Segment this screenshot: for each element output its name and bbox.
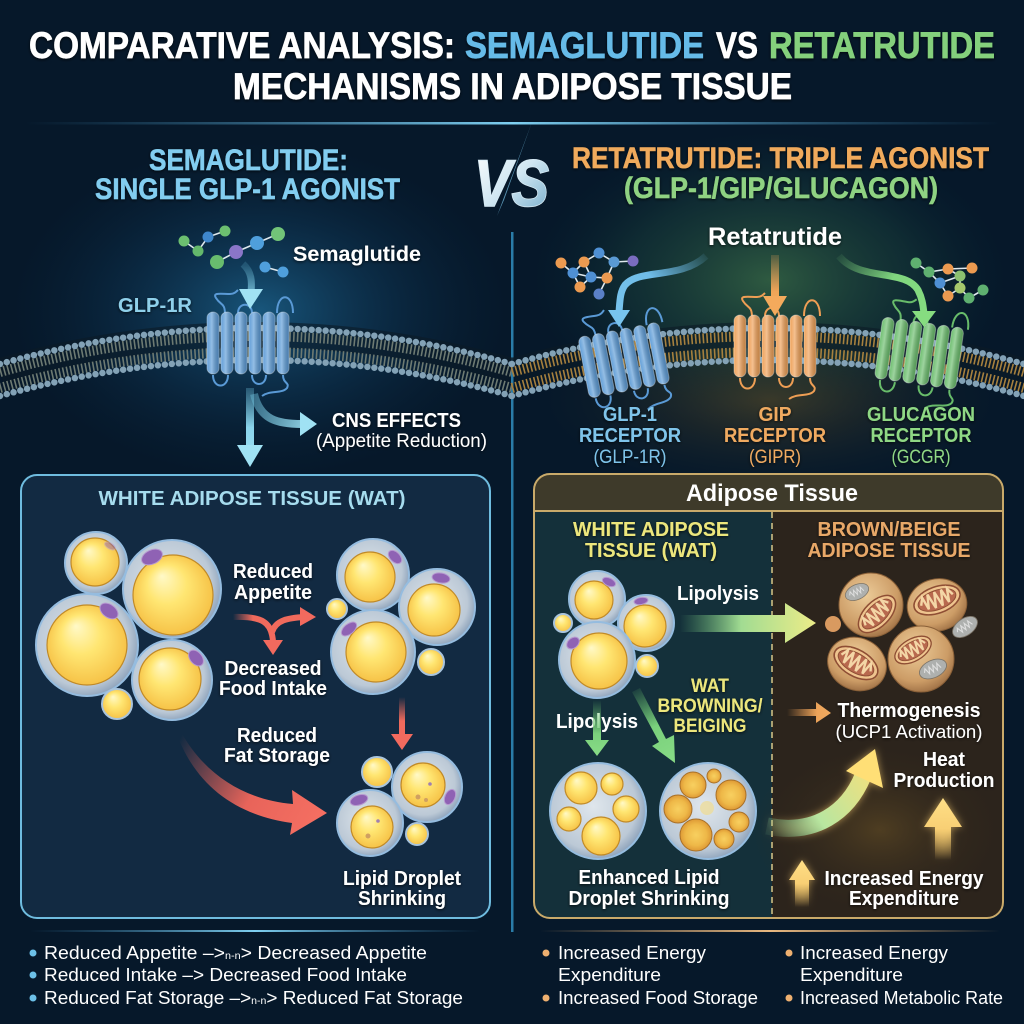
heading: brown beige adipose tissue: ADIPOSE TISSUE	[808, 540, 970, 562]
label: heat production: Production	[894, 770, 994, 792]
molecule: retatrutide left	[556, 248, 638, 300]
arrow: large curved arrow to thermogenesis	[767, 749, 883, 828]
list: retatrutide effects column 2: Increased Energy	[800, 943, 948, 963]
list: semaglutide effects: Reduced Fat Storage –> n-n> Reduced Fat Storage	[44, 988, 463, 1008]
heading: white adipose tissue: WHITE ADIPOSE	[573, 519, 729, 541]
divider: left bottom	[30, 930, 480, 932]
label: CNS effects: CNS EFFECTS	[332, 410, 461, 432]
label: reduced fat storage: Reduced	[237, 725, 317, 747]
title: SEMAGLUTIDE	[465, 25, 704, 66]
arrow: semaglutide to receptor	[239, 264, 263, 309]
label: GLP-1 receptor	[579, 404, 682, 468]
heading: brown beige adipose tissue: BROWN/BEIGE	[818, 519, 960, 541]
cell cluster: brown adipocytes	[819, 572, 981, 700]
arrow: to thermogenesis	[787, 702, 831, 723]
label: reduced fat storage	[224, 725, 330, 767]
list: semaglutide effects: Reduced Intake –> Decreased Food Intake	[44, 965, 407, 985]
heading: retatrutide: (GLP-1/GIP/GLUCAGON)	[624, 172, 938, 205]
divider: right bottom	[540, 930, 1000, 932]
label: decreased food intake: Decreased	[224, 658, 322, 680]
label: enhanced lipid droplet shrinking	[568, 867, 730, 910]
label: CNS effects: (Appetite Reduction)	[316, 431, 487, 452]
title: MECHANISMS IN ADIPOSE TISSUE	[233, 66, 792, 107]
label: thermogenesis: (UCP1 Activation)	[836, 722, 982, 742]
panel: semaglutide adipose tissue	[21, 475, 490, 918]
receptor: GLP-1	[574, 300, 678, 420]
membrane: right	[512, 328, 1024, 396]
cell cluster: shrunken adipocytes	[337, 752, 462, 856]
title: VS	[716, 25, 758, 66]
label: heat production	[894, 749, 994, 792]
heading: semaglutide	[95, 144, 400, 206]
label: heat production: Heat	[923, 749, 965, 771]
label: glucagon receptor: (GCGR)	[892, 447, 950, 468]
cell: enhanced droplets	[550, 763, 646, 859]
label: lipid droplet shrinking: Lipid Droplet	[343, 868, 461, 890]
list: retatrutide effects column 2: Increased Metabolic Rate	[800, 988, 1003, 1008]
cell cluster: large adipocytes	[36, 532, 221, 720]
label: reduced appetite: Reduced	[233, 561, 313, 583]
list: retatrutide effects column 1: Increased Energy	[558, 943, 706, 963]
arrow: retatrutide to GLP-1 receptor	[608, 256, 706, 327]
receptor: GIP	[734, 293, 820, 399]
receptor: GLP-1R	[207, 290, 293, 396]
label: GIP receptor	[724, 404, 827, 468]
label: WAT browning beiging	[658, 676, 763, 737]
label: retatrutide: Retatrutide	[708, 223, 842, 251]
heading: retatrutide	[572, 142, 989, 205]
arrow: to shrunken cells	[391, 697, 413, 750]
arrow: retatrutide to GIP receptor	[763, 255, 787, 316]
panel background	[534, 474, 1010, 920]
membrane: left	[0, 328, 512, 396]
list: semaglutide effects: Reduced Appetite –> n-n> Decreased Appetite	[44, 943, 427, 963]
label: GIP receptor: RECEPTOR	[724, 425, 827, 447]
label: CNS effects	[316, 410, 487, 452]
receptor: glucagon	[871, 295, 971, 412]
label: WAT browning beiging: WAT	[691, 676, 729, 697]
heading: white adipose tissue: TISSUE (WAT)	[585, 540, 717, 562]
arrow: WAT browning	[632, 688, 675, 763]
cell: beige droplets	[660, 763, 756, 859]
label: enhanced lipid droplet shrinking: Enhanced Lipid	[578, 867, 720, 889]
label: reduced appetite	[233, 561, 313, 604]
label: increased energy expenditure: Increased Energy	[824, 868, 984, 890]
center divider	[497, 122, 532, 932]
label: thermogenesis: Thermogenesis	[838, 700, 980, 722]
heading: white adipose tissue: WHITE ADIPOSE TISSUE (WAT)	[98, 488, 406, 510]
arrow: energy up	[789, 860, 815, 907]
molecule: retatrutide right	[910, 258, 988, 304]
label: GLP-1R: GLP-1R	[118, 295, 193, 317]
heading: semaglutide: SEMAGLUTIDE:	[149, 144, 348, 177]
label: GLP-1 receptor: (GLP-1R)	[594, 447, 666, 468]
label: thermogenesis	[836, 700, 982, 742]
label: decreased food intake: Food Intake	[219, 678, 327, 700]
label: enhanced lipid droplet shrinking: Droplet Shrinking	[568, 888, 730, 910]
vs badge: VS	[474, 146, 549, 220]
label: lipolysis left: Lipolysis	[556, 711, 638, 733]
label: WAT browning beiging: BEIGING	[674, 716, 746, 737]
list: semaglutide effects	[30, 943, 463, 1008]
label: GLP-1 receptor: RECEPTOR	[579, 425, 682, 447]
arrow: to CNS effects	[254, 394, 317, 436]
list: retatrutide effects column 2: Expenditure	[800, 965, 903, 985]
cell cluster: white adipocytes	[554, 571, 674, 698]
label: glucagon receptor: RECEPTOR	[870, 425, 972, 447]
list: retatrutide effects column 1: Increased Food Storage	[558, 988, 758, 1008]
arrow: lipolysis to brown tissue	[680, 603, 816, 643]
header divider	[25, 122, 1000, 124]
label: semaglutide: Semaglutide	[293, 243, 421, 266]
arrow: fork to food intake and next cluster	[233, 607, 316, 655]
title: RETATRUTIDE	[769, 25, 995, 66]
list: retatrutide effects column 1: Expenditure	[558, 965, 661, 985]
panel: retatrutide adipose tissue	[534, 474, 1010, 920]
title	[29, 25, 995, 107]
arrow: retatrutide to glucagon receptor	[839, 256, 936, 327]
label: lipolysis top: Lipolysis	[677, 583, 759, 605]
label: WAT browning beiging: BROWNING/	[658, 696, 763, 717]
label: GIP receptor: (GIPR)	[749, 447, 801, 468]
list: retatrutide effects column 2	[786, 943, 1003, 1008]
list: retatrutide effects column 1	[542, 943, 758, 1008]
label: decreased food intake	[219, 658, 327, 700]
heading: brown beige adipose tissue	[808, 519, 970, 562]
cell cluster: medium adipocytes	[327, 539, 475, 694]
label: GIP receptor: GIP	[758, 404, 792, 426]
label: reduced fat storage: Fat Storage	[224, 745, 330, 767]
title: COMPARATIVE ANALYSIS:	[29, 25, 455, 66]
label: glucagon receptor: GLUCAGON	[867, 404, 975, 426]
heading: adipose tissue: Adipose Tissue	[686, 480, 858, 507]
label: lipid droplet shrinking	[343, 868, 461, 910]
label: GLP-1 receptor: GLP-1	[603, 404, 657, 426]
molecule: semaglutide	[178, 226, 288, 278]
arrow: lipolysis down	[585, 700, 609, 756]
label: reduced appetite: Appetite	[234, 582, 312, 604]
arrow: heat up	[924, 798, 962, 860]
label: glucagon receptor	[867, 404, 975, 468]
heading: semaglutide: SINGLE GLP-1 AGONIST	[95, 173, 400, 206]
label: increased energy expenditure	[824, 868, 984, 910]
arrow: large curved red arrow	[176, 732, 327, 835]
arrow: to white adipose tissue	[237, 388, 263, 467]
label: increased energy expenditure: Expenditure	[849, 888, 959, 910]
label: lipid droplet shrinking: Shrinking	[358, 888, 446, 910]
heading: white adipose tissue	[573, 519, 729, 562]
